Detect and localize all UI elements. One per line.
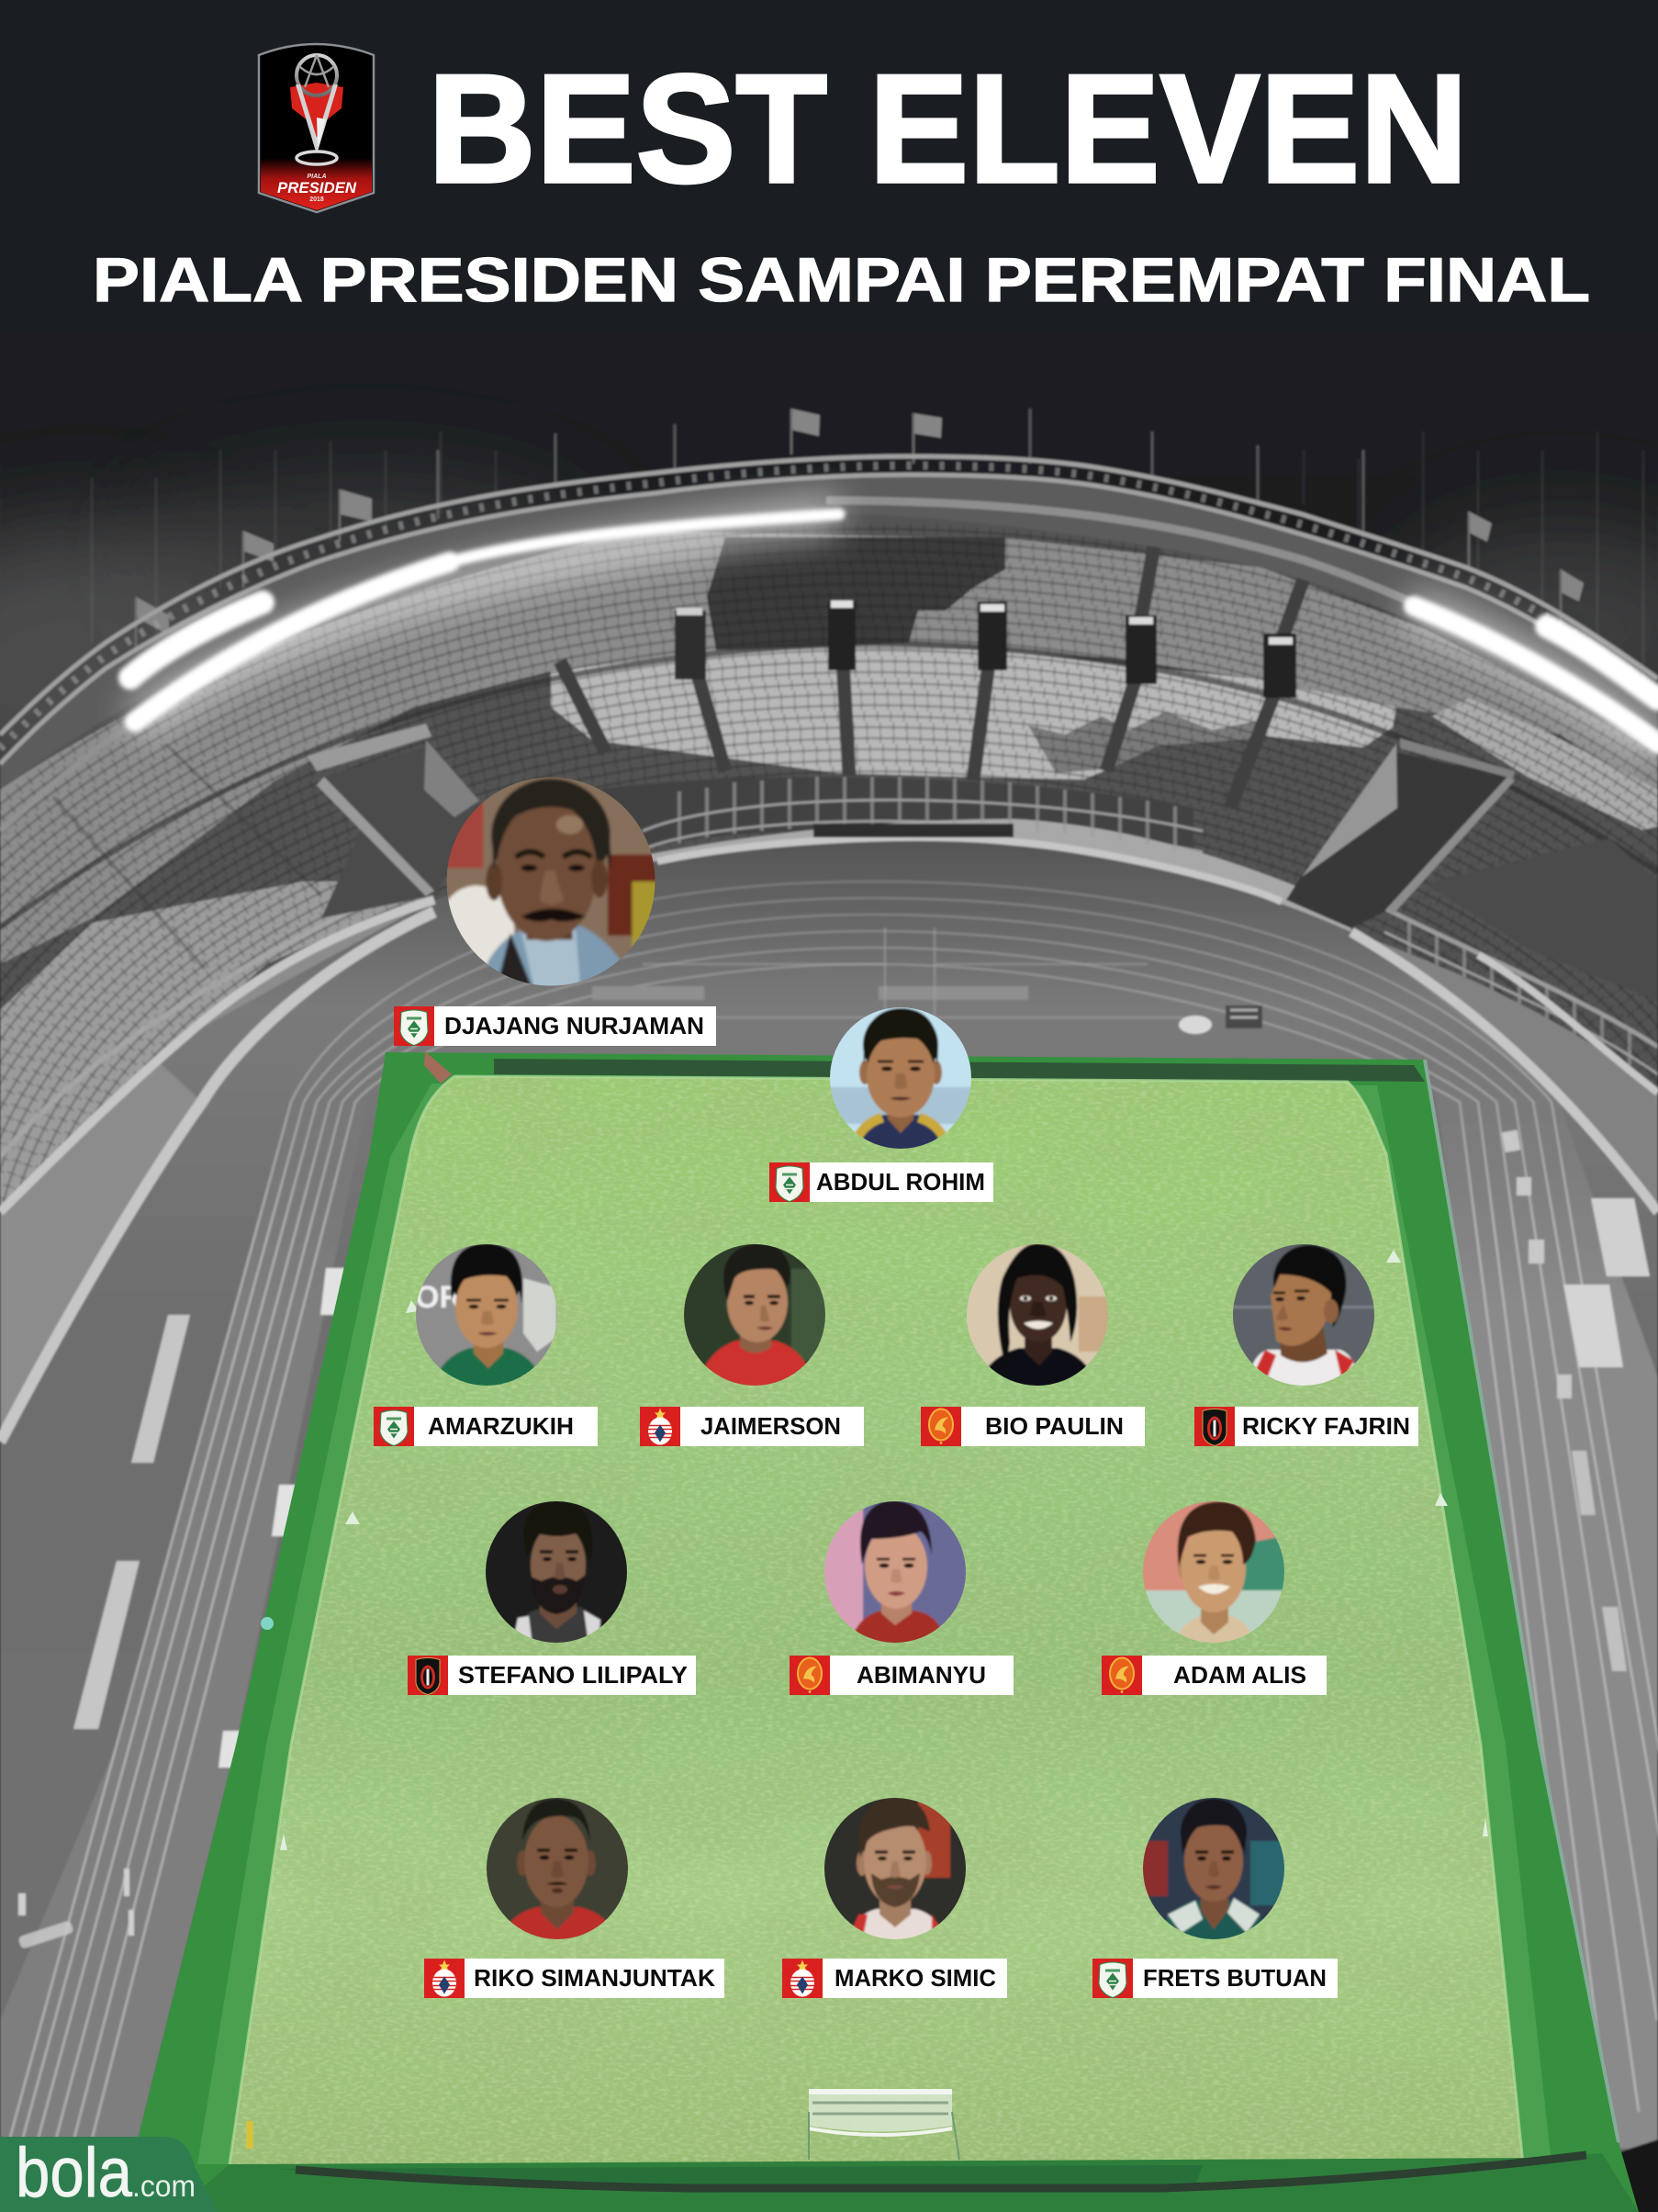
photo [964, 1241, 1111, 1388]
name label: ADAM ALIS [1173, 1661, 1306, 1689]
name label: DJAJANG NURJAMAN [444, 1012, 704, 1039]
photo: OR [415, 1280, 462, 1315]
south dark band [174, 2153, 1639, 2212]
name label [1194, 1407, 1418, 1446]
photo [822, 1499, 969, 1645]
player: Frets Butuan [1092, 1795, 1338, 1998]
diagonal aisles on the left stand [53, 744, 321, 969]
goal [809, 2089, 959, 2160]
photo [681, 1241, 828, 1388]
player: Stefano Lilipaly [408, 1499, 696, 1695]
tier divider [0, 643, 1658, 927]
left ramp and tunnel [308, 724, 479, 918]
icon: Piala Presiden logo: PRESIDEN [277, 180, 357, 196]
right ramp and tunnel [1286, 738, 1515, 928]
player: Jaimerson [640, 1241, 864, 1446]
concrete band above rim [434, 819, 1351, 946]
name label [1102, 1656, 1327, 1695]
roof underside fill [0, 475, 1658, 826]
name label [1092, 1959, 1338, 1998]
trackside benches [73, 1130, 1650, 1768]
photo [822, 1795, 969, 1942]
stadium rim [0, 837, 1658, 1442]
north shadow band [494, 1059, 1425, 1082]
icon: Piala Presiden logo [259, 44, 374, 212]
seat column ticks [0, 529, 1658, 2042]
empty dark block, centre of upper tier [707, 537, 1005, 650]
icon: Piala Presiden logo: PIALA [307, 174, 327, 180]
name label: JAIMERSON [700, 1412, 841, 1440]
far-right upper tier [1432, 698, 1658, 830]
photo [1230, 1241, 1377, 1388]
name label: FRETS BUTUAN [1143, 1964, 1327, 1992]
icon: Piala Presiden logo: 2018 [309, 196, 324, 203]
apron inner strip [197, 1084, 1552, 2164]
title: BEST ELEVEN [428, 42, 1468, 215]
lighter seats, centre of lower tier [551, 648, 1396, 780]
vomitory portals [675, 601, 1296, 698]
photo [413, 1241, 560, 1388]
player: Amarzukih [374, 1241, 598, 1446]
sky and light streaks [0, 331, 1658, 808]
name label: BIO PAULIN [985, 1412, 1124, 1440]
grass lawn [138, 1056, 1607, 2212]
lighter lane zones beside the pitch [1432, 1056, 1658, 2149]
photo [439, 773, 662, 990]
name label: RICKY FAJRIN [1242, 1412, 1410, 1440]
flags on roof [136, 409, 1584, 657]
name label [790, 1656, 1014, 1695]
player: Abimanyu [790, 1499, 1014, 1695]
name label [640, 1407, 864, 1446]
south fence [296, 2155, 1586, 2188]
player: Adam Alis [1102, 1499, 1327, 1695]
player: Ricky Fajrin [1194, 1241, 1418, 1446]
name label [394, 1006, 716, 1046]
player: Bio Paulin [921, 1241, 1145, 1446]
barrier and benches at north end [592, 824, 1262, 1056]
name label: STEFANO LILIPALY [458, 1661, 688, 1689]
vomitory columns [560, 542, 1304, 808]
perimeter railing [0, 800, 1658, 1157]
lower-left lit seats [0, 881, 434, 1212]
dark strip behind rail [597, 777, 1193, 854]
bola.com logo: .com [132, 2169, 196, 2203]
photo [483, 1499, 630, 1645]
upper tier [0, 531, 1658, 964]
floodlight glow [135, 514, 1658, 744]
bola.com logo [0, 2134, 218, 2212]
running track lanes [0, 881, 1658, 2212]
football pitch [138, 1051, 1639, 2212]
dark seats, right of lower tier patches [1028, 712, 1258, 773]
photo [827, 1005, 974, 1151]
photo [1140, 1499, 1287, 1645]
name label [769, 1162, 993, 1202]
concourse left [0, 900, 434, 1442]
name label [424, 1959, 724, 1998]
player: Riko Simanjuntak [424, 1795, 724, 1998]
name label: ABDUL ROHIM [816, 1168, 985, 1196]
outer grass apron [138, 1052, 1639, 2212]
photo [484, 1795, 631, 1942]
player: Djajang Nurjaman (coach) [394, 773, 716, 1046]
black corner of grandstand, bottom right [1552, 2139, 1658, 2212]
name label: MARKO SIMIC [835, 1964, 996, 1992]
seat row lines [0, 529, 1658, 2042]
right edge line [1425, 1060, 1619, 2142]
runners, lower left [17, 1869, 134, 1949]
name label [921, 1407, 1145, 1446]
header band [93, 42, 1590, 315]
name label: AMARZUKIH [428, 1412, 574, 1440]
corner flags and ball-kids [246, 1051, 1488, 2149]
subtitle: PIALA PRESIDEN SAMPAI PEREMPAT FINAL [93, 245, 1590, 315]
name label: ABIMANYU [857, 1661, 986, 1689]
roof truss [0, 456, 1658, 831]
name label [374, 1407, 598, 1446]
running track base [0, 826, 1658, 2212]
floodlights [130, 514, 1658, 744]
concourse right [1351, 932, 1658, 1212]
bola.com logo: bola [16, 2134, 133, 2212]
stand seating [0, 515, 1658, 1205]
name label [408, 1656, 696, 1695]
name label: RIKO SIMANJUNTAK [474, 1964, 715, 1992]
name label [782, 1959, 1007, 1998]
player: Abdul Rohim [769, 1005, 993, 1202]
lower-right dark stand [1425, 838, 1658, 1001]
player: Marko Simic [782, 1795, 1007, 1998]
photo [1140, 1795, 1287, 1942]
